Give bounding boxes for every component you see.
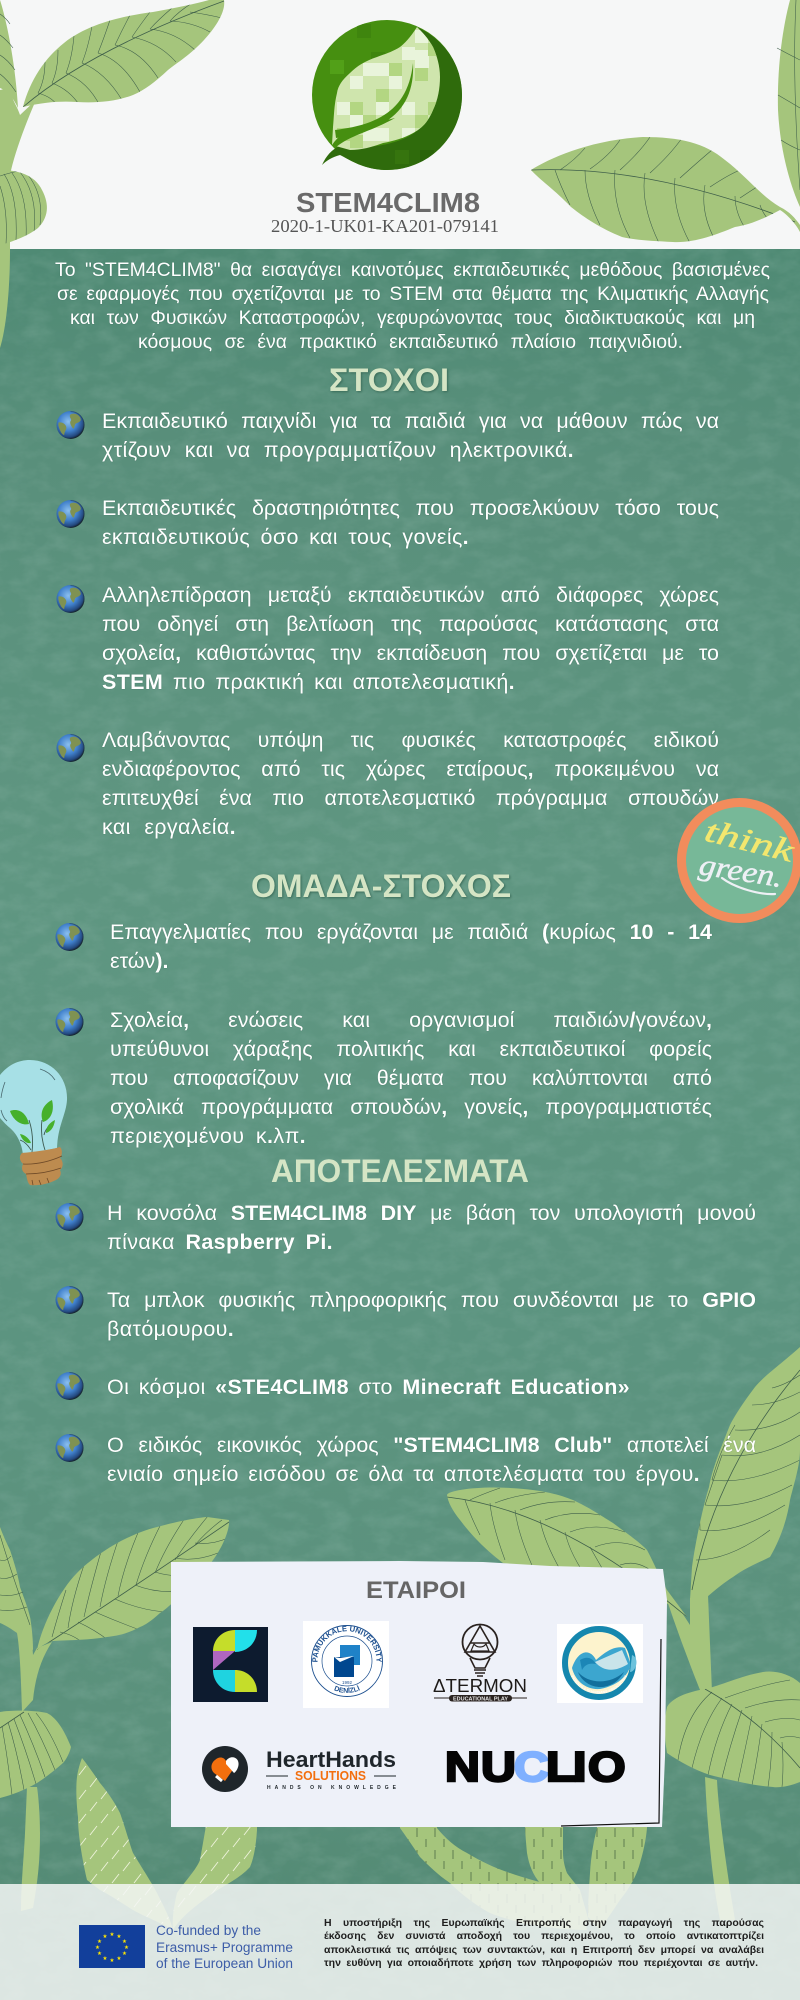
result 1 text [107,1201,756,1254]
footer: EU co-funding logo: of the European Union [156,1956,293,1971]
goal 1 text: χτίζουν και να προγραμματίζουν ηλεκτρονικά. [102,438,574,462]
panel corner line [561,1639,661,1826]
dashed leaves bottom centre [400,1820,647,1930]
result 3 text: Οι κόσμοι «STE4CLIM8 στο Minecraft Education» [107,1375,630,1399]
project name: STEM4CLIM8 [296,187,480,218]
footer: EU co-funding logo: Co-funded by the [156,1923,261,1938]
logo: HeartHands Solutions: HANDS ON KNOWLEDGE [267,1785,397,1791]
logo: Pamukkale University [303,1621,389,1708]
footer: EU co-funding logo: ★ [117,1934,122,1940]
footer: EU co-funding logo: ★ [97,1939,102,1945]
target group 2 text: σχολικά προγράμματα σπουδών, γονείς, προγραμματιστές [110,1095,712,1119]
footer: EU co-funding logo: ★ [110,1958,115,1964]
icon: globe bullet result 1 [56,1203,84,1231]
panel: partners [171,1561,667,1827]
logo: HeartHands Solutions: SOLUTIONS [295,1768,366,1783]
goal 4 text: Λαμβάνοντας υπόψη τις φυσικές καταστροφές ειδικού [102,728,719,752]
footer: disclaimer text: την ευθύνη για οποιαδήποτε χρήση των πληροφοριών που περιέχονται σε αυτήν. [324,1957,758,1969]
footer: EU co-funding logo: ★ [95,1945,100,1951]
target group 2 text: υπεύθυνοι χάραξης πολιτικής και εκπαιδευτικοί φορείς [110,1037,712,1061]
section heading: target group: ΟΜΑΔΑ-ΣΤΟΧΟΣ [251,868,511,904]
goal 3 text: σχολεία, καθιστώντας την εκπαίδευση που σχετίζεται με το [102,641,719,665]
partners heading: ΕΤΑΙΡΟΙ [366,1577,466,1604]
intro paragraph: και των Φυσικών Καταστροφών, γεφυρώνοντας τους διαδικτυακούς και μη [70,307,755,329]
logo: HeartHands Solutions [202,1746,397,1792]
icon: globe bullet result 4 [56,1434,84,1462]
footer: EU co-funding logo: ★ [122,1951,127,1957]
goal 4 text: ενδιαφέροντος από τις χώρες εταίρους, προκειμένου να [102,757,719,781]
goal 1 text [102,409,719,462]
logo leaf emblem [312,20,462,170]
logo: Pamukkale University: DENİZLİ [334,1684,360,1693]
icon: globe bullet goal 2 [56,500,84,528]
footer: disclaimer text [324,1917,764,1969]
goal 3 text: που οδηγεί στη βελτίωση της παρούσας κατάστασης στα [102,612,719,636]
footer: EU co-funding logo: Erasmus+ Programme [156,1940,293,1955]
intro paragraph: σε εφαρμογές που σχετίζονται με το STEM στα θέματα της Κλιματικής Αλλαγής [57,283,769,305]
project code: 2020-1-UK01-KA201-079141 [271,216,499,236]
logo: school parents association: PARENTS & GUARDIANS ASSOCIATION [571,1675,627,1694]
goal 1 text: Εκπαιδευτικό παιχνίδι για τα παιδιά για να μάθουν πώς να [102,409,719,433]
result 2 text [107,1288,756,1341]
result 4 text [107,1433,756,1486]
result 1 text: Η κονσόλα STEM4CLIM8 DIY με βάση τον υπολογιστή μονού [107,1201,756,1225]
section heading: goals: ΣΤΟΧΟΙ [329,362,449,398]
target group 2 text [110,1008,712,1148]
footer: EU co-funding logo: ★ [103,1956,108,1962]
footer: EU co-funding logo: ★ [122,1939,127,1945]
hatched leaf pair bottom left [76,1758,257,1930]
logo: Nuclio: NUCLIO [445,1743,626,1790]
intro paragraph [55,259,770,353]
goal 2 text: Εκπαιδευτικές δραστηριότητες που προσελκύουν τόσο τους [102,496,719,520]
result 4 text: ενιαίο σημείο εισόδου σε όλα τα αποτελέσματα του έργου. [107,1462,700,1486]
footer: disclaimer text: αποκλειστικά τις απόψεις των συντακτών, και η Επιτροπή δεν μπορεί να αναλάβει [324,1944,764,1956]
icon: globe bullet result 2 [56,1286,84,1314]
logo: Atermon: ΔTERMON [433,1676,527,1696]
result 1 text: πίνακα Raspberry Pi. [107,1230,333,1254]
target group 1 text: ετών). [110,949,168,973]
icon: light bulb with sprout [0,1060,67,1185]
footer: EU co-funding logo: ★ [117,1956,122,1962]
target group 2 text: που αποφασίζουν για θέματα που καλύπτονται από [110,1066,712,1090]
result 4 text: Ο ειδικός εικονικός χώρος "STEM4CLIM8 Club" αποτελεί ένα [107,1433,756,1457]
logo and project title [271,20,499,236]
logo: Atermon [433,1624,527,1702]
goal 2 text [102,496,719,549]
goal 4 text: επιτευχθεί ένα πιο αποτελεσματικό πρόγραμμα σπουδών [102,786,719,810]
target group 1 text [110,920,712,973]
logo: school parents association [557,1624,643,1703]
result 2 text: Τα μπλοκ φυσικής πληροφορικής που συνδέονται με το GPIO [107,1288,756,1312]
intro paragraph: κόσμους σε ένα πρακτικό εκπαιδευτικό πλαίσιο παιχνιδιού. [138,331,683,353]
footer: EU co-funding logo: ★ [103,1934,108,1940]
think green badge: green. [697,848,785,894]
icon: globe bullet target 2 [56,1008,84,1036]
icon: globe bullet goal 4 [56,734,84,762]
goal 3 text: Αλληλεπίδραση μεταξύ εκπαιδευτικών από διάφορες χώρες [102,583,719,607]
icon: globe bullet target 1 [56,923,84,951]
footer: EU co-funding logo [79,1923,293,1971]
logo: Pamukkale University: 1992 [342,1680,353,1685]
goal 3 text [102,583,719,694]
logo: Atermon: EDUCATIONAL PLAY [453,1696,509,1702]
footer translucent band [0,1884,800,2000]
footer: EU co-funding logo: ★ [97,1951,102,1957]
target group 2 text: Σχολεία, ενώσεις και οργανισμοί παιδιών/γονέων, [110,1008,712,1032]
footer: EU co-funding logo: ★ [124,1945,129,1951]
think green badge: think [701,812,798,869]
section heading: results: ΑΠΟΤΕΛΕΣΜΑΤΑ [271,1153,529,1189]
footer: disclaimer text: έκδοσης δεν συνιστά αποδοχή του περιεχομένου, το οποίο αντικατοπτρίζει [324,1930,764,1942]
icon: globe bullet goal 1 [56,411,84,439]
bottom left plant [0,1516,229,1911]
logo: partner K [193,1627,268,1702]
footer: disclaimer text: Η υποστήριξη της Ευρωπαϊκής Επιτροπής στην παραγωγή της παρούσας [324,1917,764,1929]
logo: HeartHands Solutions: HeartHands [266,1747,396,1772]
logo: Pamukkale University: PAMUKKALE UNIVERSITY [312,1626,382,1662]
intro paragraph: Το "STEM4CLIM8" θα εισαγάγει καινοτόμες εκπαιδευτικές μεθόδους βασισμένες [55,259,770,281]
top right edge leaf [777,0,800,207]
top right large leaf [531,137,800,245]
goal 3 text: STEM πιο πρακτική και αποτελεσματική. [102,670,515,694]
result 2 text: βατόμουρου. [107,1317,234,1341]
bottom right plant [447,1347,800,1920]
target group 2 text: περιεχομένου κ.λπ. [110,1124,306,1148]
goal 2 text: εκπαιδευτικούς όσο και τους γονείς. [102,525,469,549]
goal 4 text: και εργαλεία. [102,815,236,839]
header background [0,0,800,250]
think green badge [682,802,798,918]
icon: globe bullet result 3 [56,1372,84,1400]
icon: globe bullet goal 3 [56,585,84,613]
top left plant [0,0,224,348]
footer: EU co-funding logo: ★ [110,1932,115,1938]
target group 1 text: Επαγγελματίες που εργάζονται με παιδιά (κυρίως 10 - 14 [110,920,712,944]
goal 4 text [102,728,719,839]
